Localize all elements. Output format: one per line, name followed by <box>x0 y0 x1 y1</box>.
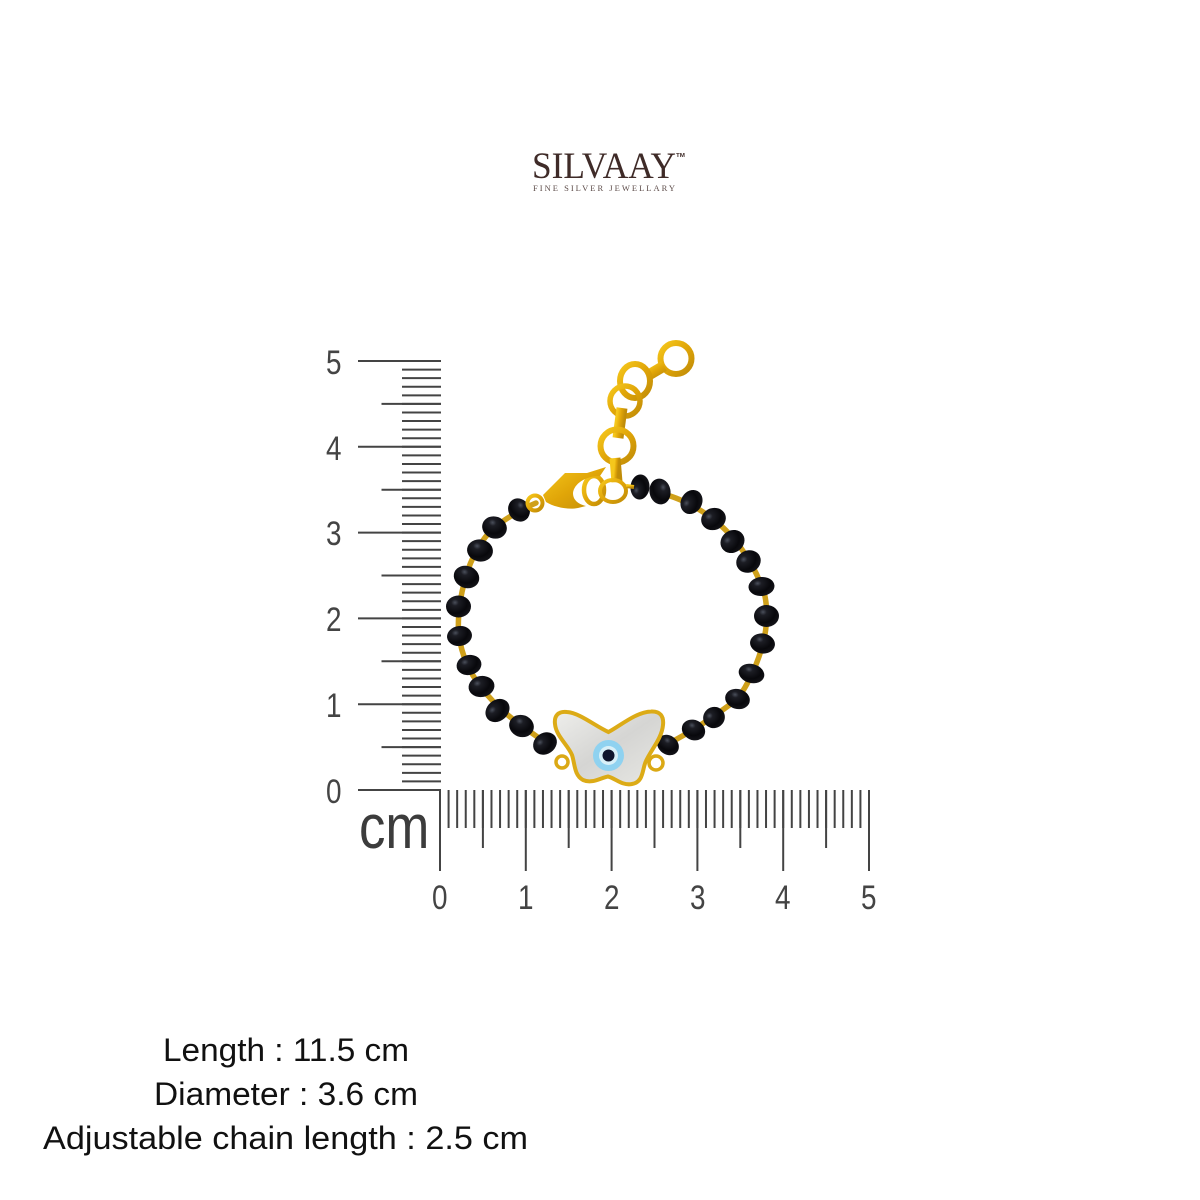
unit label: cm: cm <box>359 793 429 862</box>
butterfly charm <box>555 711 663 784</box>
vertical ruler: 2 <box>326 600 342 639</box>
black beads <box>446 474 779 759</box>
logo: Silvaay: SILVAAY <box>532 146 676 187</box>
lobster clasp <box>543 467 606 509</box>
evil eye <box>593 740 624 771</box>
vertical ruler: 4 <box>326 429 342 468</box>
horizontal ruler: 0 <box>432 878 448 917</box>
vertical ruler: 0 <box>326 772 342 811</box>
bracelet <box>446 343 779 784</box>
product dimensions: Length : 11.5 cm <box>163 1032 409 1068</box>
horizontal ruler: 5 <box>861 878 877 917</box>
vertical ruler <box>326 343 441 811</box>
logo: Silvaay: FINE SILVER JEWELLARY <box>533 183 675 193</box>
horizontal ruler <box>432 789 877 917</box>
horizontal ruler: 4 <box>775 878 791 917</box>
gold chain links <box>458 493 767 744</box>
vertical ruler: 5 <box>326 343 342 382</box>
horizontal ruler: 1 <box>518 878 534 917</box>
vertical ruler: 1 <box>326 686 342 725</box>
horizontal ruler: 3 <box>690 878 706 917</box>
product dimensions: Diameter : 3.6 cm <box>154 1076 418 1112</box>
vertical ruler: 3 <box>326 514 342 553</box>
logo: Silvaay: TM <box>676 153 685 159</box>
clasp and extender chain <box>528 343 692 510</box>
product dimensions <box>43 1032 528 1156</box>
product dimensions: Adjustable chain length : 2.5 cm <box>43 1120 528 1156</box>
horizontal ruler: 2 <box>604 878 620 917</box>
